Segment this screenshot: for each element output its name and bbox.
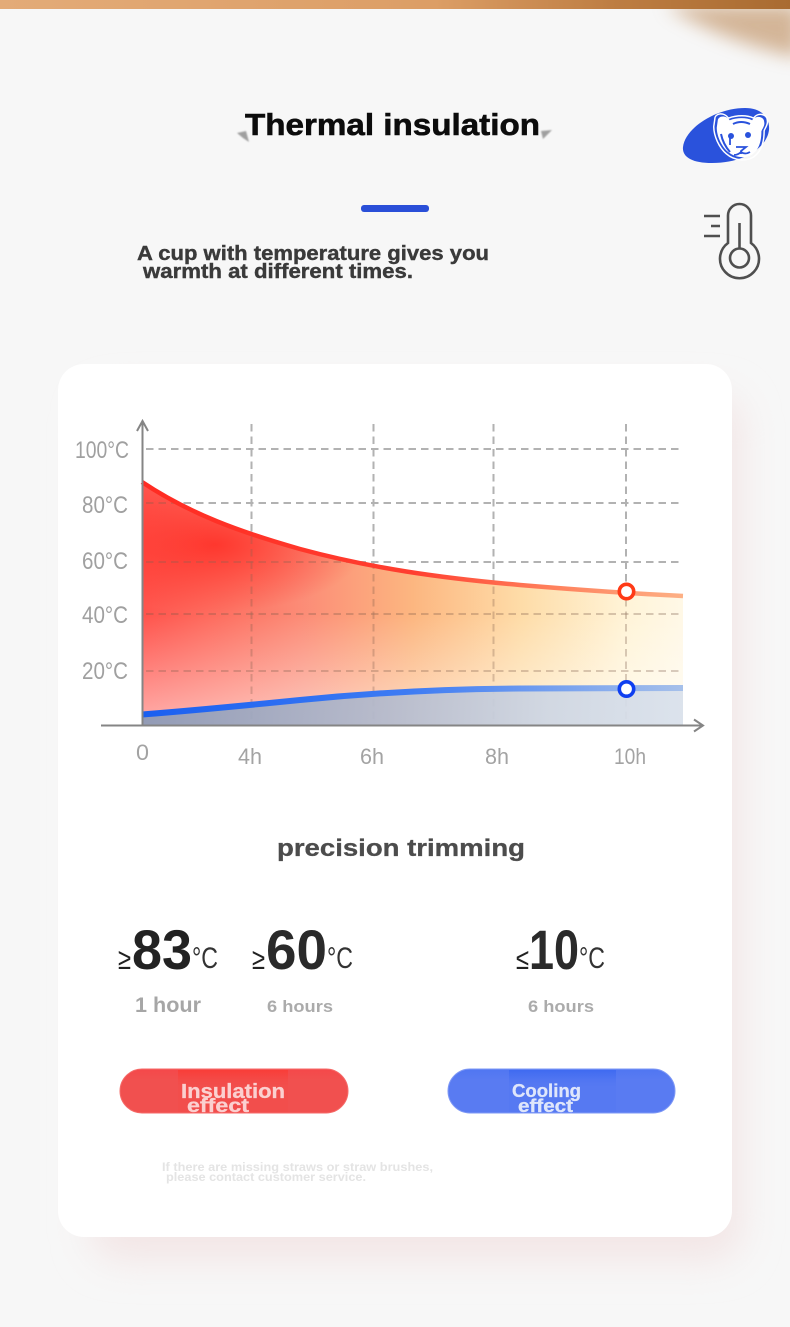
chart: y axis labels: 20°C: [82, 658, 128, 685]
chart: red curve: [142, 482, 683, 596]
stat: 60 degrees for 6 hours: 6 hours: [267, 997, 333, 1016]
chart: axes: [101, 421, 703, 732]
footnote: [162, 1162, 433, 1184]
subtitle text: A cup with temperature gives you: [137, 242, 489, 265]
stat: 83 degrees for 1 hour: °C: [192, 942, 218, 975]
button: cooling effect: Cooling: [512, 1081, 581, 1101]
white card panel: [58, 364, 732, 1237]
stat: 60 degrees for 6 hours: ≥: [252, 943, 265, 976]
icon: tiger logo: [683, 108, 769, 163]
chart caption: precision trimming: [277, 835, 525, 862]
stat: 83 degrees for 1 hour: ≥: [118, 943, 131, 976]
corner shadow blob: [665, 5, 790, 58]
stat: 10 degrees for 6 hours: 10: [529, 918, 579, 981]
subtitle text: warmth at different times.: [142, 260, 413, 283]
chart: blue marker: [619, 682, 634, 696]
card shadow: [90, 395, 742, 1261]
stat: 83 degrees for 1 hour: 1 hour: [135, 994, 201, 1017]
chart: y axis labels: 80°C: [82, 492, 128, 519]
button: insulation effect: effect: [187, 1096, 250, 1117]
stat: 60 degrees for 6 hours: [252, 918, 353, 1016]
footnote: If there are missing straws or straw brushes,: [162, 1162, 433, 1174]
stat: 10 degrees for 6 hours: ≤: [516, 943, 529, 976]
button: insulation effect: [120, 1069, 348, 1117]
chart: x axis labels: 6h: [360, 744, 384, 769]
chart: y axis labels: 60°C: [82, 548, 128, 575]
subtitle text: [137, 242, 489, 283]
chart: x axis labels: 10h: [614, 744, 646, 769]
chart: y axis labels: [75, 437, 129, 685]
stat: 10 degrees for 6 hours: [516, 918, 605, 1016]
chart: y axis labels: 40°C: [82, 602, 128, 629]
chart: x axis labels: [136, 740, 646, 769]
chart: blue cooling area: [142, 687, 683, 725]
temperature line chart: [75, 421, 703, 769]
stat: 83 degrees for 1 hour: [118, 918, 218, 1017]
chart: x axis labels: 4h: [238, 744, 262, 769]
stat: 10 degrees for 6 hours: 6 hours: [528, 997, 594, 1016]
title: Thermal insulation: [245, 107, 540, 142]
stat: 83 degrees for 1 hour: 83: [132, 918, 192, 981]
stat: 60 degrees for 6 hours: °C: [327, 942, 353, 975]
button: cooling effect: [448, 1069, 675, 1116]
chart: x axis labels: 0: [136, 740, 149, 765]
chart: blue curve: [142, 688, 683, 714]
icon: thermometer: [704, 204, 759, 278]
chart: y axis labels: 100°C: [75, 437, 129, 464]
footnote: please contact customer service.: [166, 1172, 366, 1184]
top gradient bar: [0, 0, 790, 9]
button: cooling effect: effect: [518, 1096, 573, 1116]
chart: red insulation area: [144, 486, 683, 712]
stat: 60 degrees for 6 hours: 60: [266, 918, 327, 981]
button: insulation effect: Insulation: [181, 1081, 285, 1103]
chart: grid lines: [146, 424, 680, 722]
chart: x axis labels: 8h: [485, 744, 509, 769]
title accent bar: [361, 205, 429, 212]
stat: 10 degrees for 6 hours: °C: [579, 942, 605, 975]
chart: red marker: [619, 584, 634, 599]
